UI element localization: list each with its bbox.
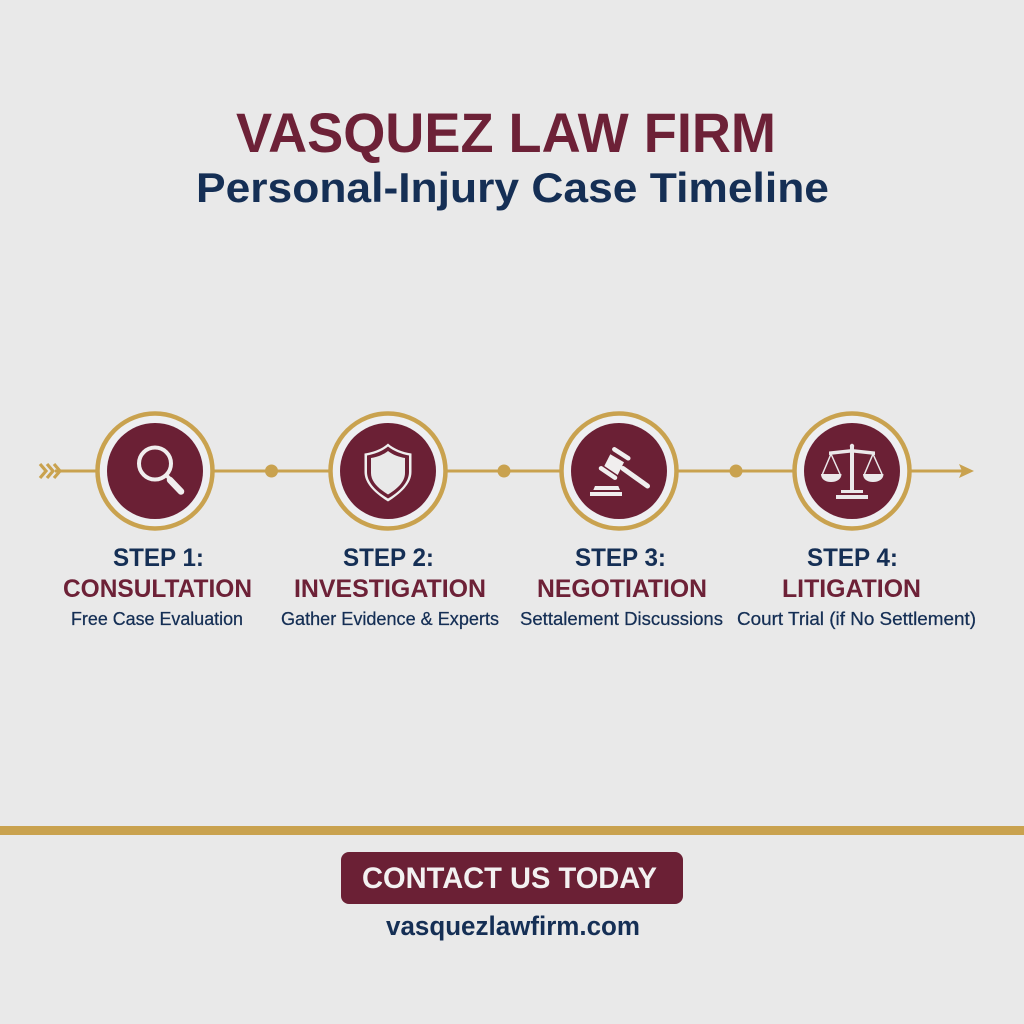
step 2 label: Gather Evidence & Experts xyxy=(281,608,499,629)
step 2 icon: shield xyxy=(330,414,446,528)
step 3 label xyxy=(520,544,723,629)
title: VASQUEZ LAW FIRM xyxy=(236,101,776,164)
connector dot 3 xyxy=(730,464,742,478)
subtitle: Personal-Injury Case Timeline xyxy=(196,164,829,211)
step 3 label: NEGOTIATION xyxy=(537,575,707,603)
step 3 label: STEP 3: xyxy=(575,544,666,572)
contact button xyxy=(341,852,683,904)
connector dot 2 xyxy=(498,464,510,478)
timeline connector line xyxy=(55,470,962,472)
step 2 label: INVESTIGATION xyxy=(294,575,486,603)
step 4 label xyxy=(737,544,976,629)
step 1 label: CONSULTATION xyxy=(63,575,252,603)
step 3 icon: gavel xyxy=(562,414,676,528)
step 4 label: STEP 4: xyxy=(807,544,898,572)
website url: vasquezlawfirm.com xyxy=(386,911,640,941)
icon: end arrowhead xyxy=(959,464,974,478)
connector dot 1 xyxy=(265,464,278,478)
step 1 icon: magnifying glass xyxy=(98,414,212,528)
icon: start chevrons xyxy=(40,464,60,478)
step 1 label: Free Case Evaluation xyxy=(71,608,243,629)
step 2 label: STEP 2: xyxy=(343,544,434,572)
footer divider bar xyxy=(0,826,1024,835)
step 4 label: LITIGATION xyxy=(782,575,921,603)
step 1 label: STEP 1: xyxy=(113,544,204,572)
contact button: CONTACT US TODAY xyxy=(362,862,657,895)
timeline xyxy=(40,464,974,478)
step 3 label: Settalement Discussions xyxy=(520,608,723,629)
step 2 label xyxy=(281,544,499,629)
step 4 icon: scales of justice xyxy=(794,414,910,528)
step 1 label xyxy=(63,544,252,629)
step 4 label: Court Trial (if No Settlement) xyxy=(737,608,976,629)
